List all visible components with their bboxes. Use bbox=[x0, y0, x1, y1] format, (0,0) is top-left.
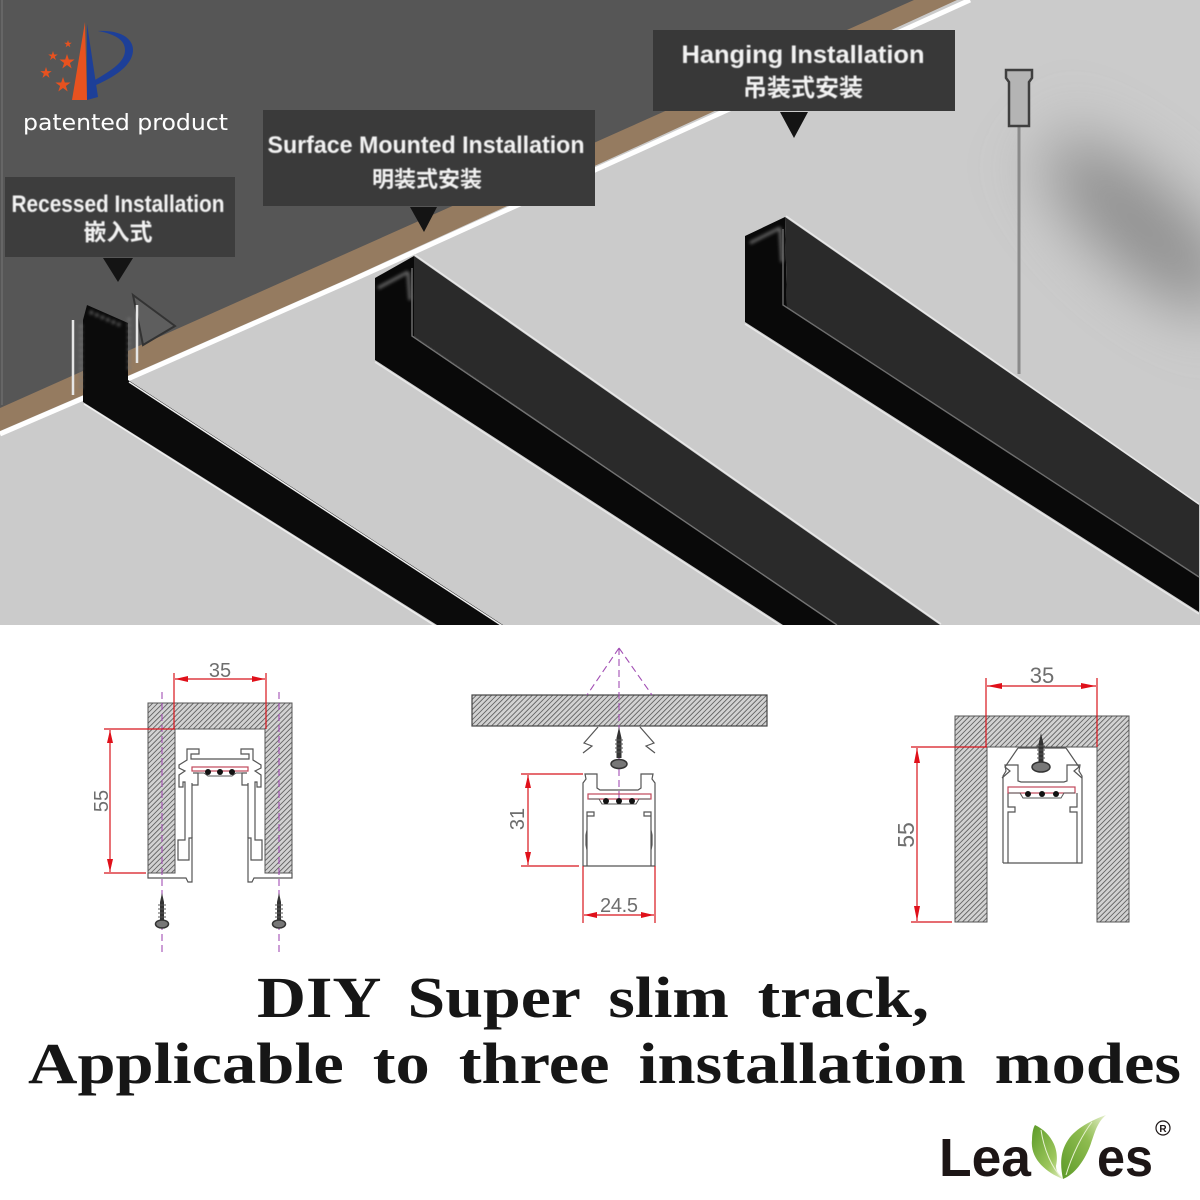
LED board bbox=[192, 767, 248, 771]
patented product text: patented product bbox=[23, 111, 228, 136]
diagram: hanging/recess cross-section bbox=[893, 663, 1129, 922]
track highlight edges bbox=[745, 216, 1199, 614]
callout text: Recessed Installation bbox=[12, 191, 224, 218]
mounting clip bbox=[1002, 748, 1082, 778]
recessed track bbox=[73, 295, 504, 627]
track edge line bbox=[412, 268, 837, 625]
track highlight edges bbox=[375, 255, 941, 627]
track profile bbox=[148, 749, 292, 882]
callout pointer bbox=[103, 258, 133, 282]
registered mark: R bbox=[1159, 1124, 1167, 1135]
hatched ceiling plate bbox=[472, 695, 767, 726]
callout text bbox=[268, 132, 584, 192]
dimension 35 bbox=[174, 660, 266, 729]
track face bbox=[785, 217, 1199, 577]
centre lines bbox=[162, 692, 279, 953]
dimension 35 bbox=[986, 663, 1097, 747]
dimension 24.5 bbox=[583, 866, 655, 923]
white ceiling edge bbox=[0, 0, 970, 434]
callout: recessed installation bbox=[5, 177, 235, 282]
callout text bbox=[682, 41, 924, 102]
callout: hanging installation bbox=[653, 30, 955, 138]
callout text: 嵌入式 bbox=[84, 219, 152, 245]
dimension 55: 55 bbox=[893, 822, 919, 848]
callout text: 明装式安装 bbox=[372, 167, 482, 192]
screw bbox=[1032, 733, 1050, 772]
ceiling scene bbox=[0, 0, 1200, 627]
recess bracket triangle bbox=[133, 295, 175, 345]
orange spike bbox=[72, 22, 87, 100]
callout text: Surface Mounted Installation bbox=[268, 132, 584, 159]
dimension 31 bbox=[507, 774, 583, 866]
leaf veins bbox=[1041, 1122, 1092, 1178]
callout pointer bbox=[410, 207, 437, 232]
recess fuzzy stub edges bbox=[81, 312, 129, 390]
track face bbox=[414, 256, 940, 625]
soft shadow on ceiling bbox=[1023, 113, 1200, 337]
track profile bbox=[1003, 765, 1082, 863]
title bbox=[28, 965, 1181, 1096]
hanger rod bbox=[1018, 125, 1020, 374]
recessed track body bbox=[83, 305, 503, 625]
hatched recess bbox=[955, 716, 1129, 922]
dimension 55 bbox=[893, 747, 987, 922]
dimension 35: 35 bbox=[209, 660, 231, 682]
blue spike bbox=[87, 24, 98, 100]
track profile bbox=[583, 774, 655, 866]
dimension 55 bbox=[91, 729, 175, 873]
dimension 55: 55 bbox=[91, 790, 113, 812]
callout text: 吊装式安装 bbox=[743, 75, 863, 102]
screw left bbox=[156, 893, 168, 928]
track highlight edges bbox=[84, 382, 504, 627]
right leaf bbox=[1061, 1115, 1106, 1179]
left leaf bbox=[1032, 1125, 1063, 1179]
hanger cap bbox=[1006, 70, 1032, 126]
LED dots bbox=[1009, 793, 1075, 798]
mounting clip bbox=[583, 727, 655, 753]
LED dots bbox=[198, 773, 242, 776]
title: Applicable to three installation modes bbox=[28, 1031, 1181, 1096]
track side bbox=[745, 217, 1199, 612]
stars bbox=[40, 40, 75, 91]
wordmark right: es bbox=[1097, 1128, 1153, 1188]
screw right bbox=[272, 893, 286, 928]
brand logo: Leaves bbox=[939, 1115, 1170, 1188]
LED board bbox=[588, 794, 651, 799]
hanging track bbox=[745, 70, 1199, 614]
screw bbox=[611, 727, 627, 768]
patent logo bbox=[40, 22, 133, 100]
callout pointer bbox=[780, 112, 808, 138]
ceiling surface bbox=[0, 0, 1200, 625]
track edge line bbox=[783, 229, 1199, 577]
callout text: Hanging Installation bbox=[682, 41, 924, 69]
blue arc bbox=[95, 31, 133, 85]
dark wall bbox=[0, 0, 930, 420]
surface mounted track bbox=[375, 255, 941, 627]
diagram: recessed cross-section bbox=[91, 660, 292, 953]
recess side lines bbox=[73, 305, 137, 395]
wordmark left: Lea bbox=[939, 1128, 1032, 1188]
LED dots bbox=[589, 799, 650, 804]
diagram: surface mounted cross-section bbox=[472, 648, 767, 923]
callout text bbox=[12, 191, 224, 245]
dimension 24.5: 24.5 bbox=[600, 895, 638, 917]
wood strip bbox=[0, 0, 957, 431]
registered mark bbox=[1156, 1121, 1170, 1135]
centre lines bbox=[587, 648, 652, 803]
title: DIY Super slim track, bbox=[257, 965, 929, 1030]
dimension 35: 35 bbox=[1030, 663, 1054, 688]
track side bbox=[375, 256, 837, 625]
LED board bbox=[1008, 787, 1075, 793]
dimension 31: 31 bbox=[507, 808, 529, 830]
callout: surface mounted installation bbox=[263, 110, 595, 232]
hatched recess bbox=[148, 703, 292, 873]
